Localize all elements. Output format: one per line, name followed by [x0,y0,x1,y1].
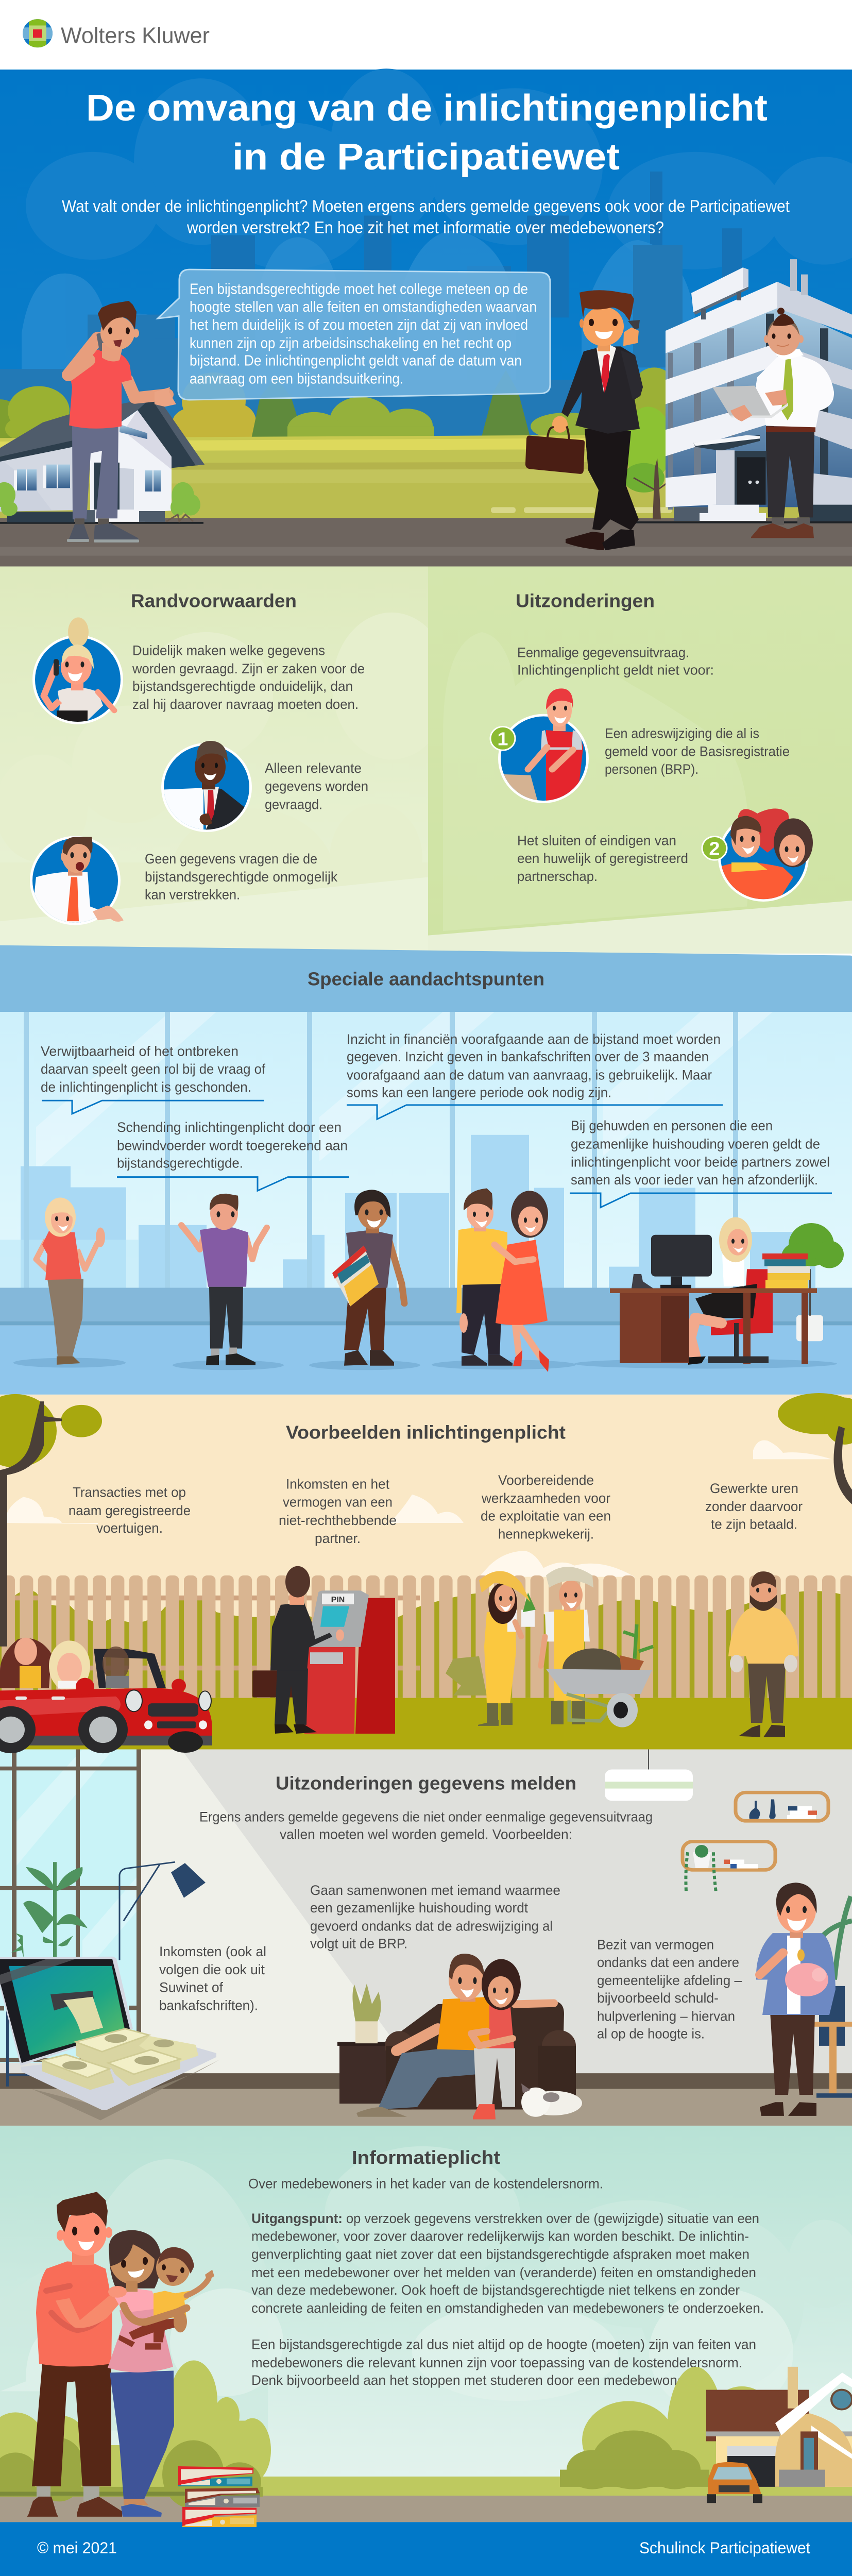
heading: Voorbeelden inlichtingenplicht [286,1421,566,1443]
text: eenmalige gegevensuitvraag: Inlichtingenplicht geldt niet voor: [517,662,714,678]
panel: randvoorwaarden [0,566,451,956]
text: huwelijk: een huwelijk of geregistreerd [517,851,688,866]
text: inkomsten en vermogen: vermogen van een [283,1494,393,1510]
text: inkomsten: volgen die ook uit [159,1962,265,1977]
illustration: fence rails [0,1596,420,1670]
text: verwijtbaarheid: Verwijtbaarheid of het ontbreken [41,1043,238,1059]
illustration: man shrugging [181,1194,267,1365]
text: gewerkte uren: te zijn betaald. [711,1516,797,1532]
text: geen gegevens: bijstandsgerechtigde onmogelijk [145,869,337,885]
text: bezit van vermogen: Bezit van vermogen [597,1937,714,1952]
text: eenmalige gegevensuitvraag: Eenmalige gegevensuitvraag. [517,645,689,660]
badge 2 [702,837,727,860]
text: adreswijziging [605,725,790,777]
text: verwijtbaarheid [41,1043,265,1114]
text: adreswijziging: gemeld voor de Basisregistratie [605,743,790,759]
text: inzicht in financien: voorafgaand aan de datum van aanvraag, is gebruikelijk. Maar [347,1067,712,1082]
callout: speech bubble: het hem duidelijk is of zou moeten zijn dat zij van invloed [190,317,528,333]
illustration: man with folders [332,1190,404,1366]
illustration: man on phone [67,301,176,543]
text: transacties: Transacties met op [73,1484,186,1500]
illustration: couple on sofa [337,1954,582,2120]
panel: voorbeelden inlichtingenplicht [0,1393,852,1753]
illustration: office desk [610,1217,844,1365]
text: samenwonen: gevoerd ondanks dat de adreswijziging al [310,1918,553,1934]
panel: speciale aandachtspunten [0,945,852,1395]
text: subhead: Over medebewoners in het kader van de kostendelersnorm. [248,2176,603,2192]
text: gewerkte uren: zonder daarvoor [705,1499,803,1514]
illustration: woman thumbs up [36,1198,105,1365]
text: verwijtbaarheid: daarvan speelt geen rol bij de vraag of [41,1061,265,1077]
illustration: house [0,398,205,522]
illustration: man at ATM [252,1566,344,1734]
icon: orange car [707,2462,762,2503]
text: bezit van vermogen: ondanks dat een andere [597,1954,739,1970]
illustration: hills and bushes [0,370,852,519]
text: huwelijk: partnerschap. [517,869,598,884]
text: uitgangspunt [251,2211,764,2316]
text: inzicht in financien: Inzicht in financiën voorafgaande aan de bijstand moet worden [347,1031,721,1047]
text: hennepkwekerij: hennepkwekerij. [498,1526,594,1541]
illustration: businessman with briefcase [525,290,643,550]
footer [0,2522,852,2576]
illustration: clouds [5,1440,832,1577]
heading: Randvoorwaarden [131,590,297,611]
heading: Uitzonderingen gegevens melden [276,1772,576,1793]
text: schending [117,1120,349,1191]
illustration: couple [456,1188,549,1372]
intro text [62,197,790,238]
text: uitgangspunt: van deze medebewoner. Ook hoeft de bijstandsgerechtigde niet telkens en zonder [251,2282,740,2298]
text: adreswijziging: personen (BRP). [605,761,698,777]
illustration: left tree [0,1394,102,1647]
text: uitgangspunt: medebewoner, voor zover daarover redelijkerwijs kan worden beschikt. De inlichtin- [251,2228,749,2244]
text: inkomsten [159,1943,266,2013]
illustration: man with tablet [712,308,834,538]
text: gewerkte uren: Gewerkte uren [710,1481,798,1496]
text: gehuwden: inlichtingenplicht voor beide partners zowel [571,1154,830,1170]
title [86,87,768,178]
panel: hero [0,69,852,566]
illustration: hedge behind fence [0,1590,852,1698]
text: intro [199,1809,653,1842]
text: uitgangspunt: Uitgangspunt: [251,2211,343,2226]
illustration: man with empty pockets [728,1571,798,1737]
text: hennepkwekerij: Voorbereidende [498,1472,594,1488]
callout: speech bubble: aanvraag om een bijstandsuitkering. [190,371,403,387]
panel: uitzonderingen gegevens melden [0,1749,852,2126]
logo wordmark: Wolters Kluwer [61,23,210,48]
text: hennepkwekerij: werkzaamheden voor [481,1490,610,1506]
text: huwelijk [517,833,688,884]
text: transacties: voertuigen. [96,1520,163,1536]
text: duidelijk maken [132,642,365,712]
text: uitgangspunt: genverplichting gaat niet zover dat een bijstandsgerechtigde afspraken moet maken [251,2246,749,2262]
text: bezit van vermogen: gemeentelijke afdeling – [597,1973,742,1988]
text: alleen relevante: gegevens worden [265,778,368,794]
icon: worker in circle with badge 1 [490,688,589,804]
text: alleen relevante [265,760,368,812]
text: adreswijziging: Een adreswijziging die al is [605,725,759,741]
text: inkomsten en vermogen: niet-rechthebbende [279,1512,397,1528]
illustration: fence [0,1575,852,1698]
heading: Speciale aandachtspunten [308,969,544,989]
illustration: friends in red car [0,1638,212,1753]
text: gehuwden: gezamenlijke huishouding voeren geldt de [571,1136,820,1151]
text: hennepkwekerij [481,1472,611,1541]
callout: speech bubble: kunnen zijn op zijn arbeidsinschakeling en het recht op [190,335,512,351]
text: duidelijk maken: zal hij daarover navraag moeten doen. [132,697,359,712]
text: samenwonen: volgt uit de BRP. [310,1936,407,1951]
text: een bijstandsgerechtigde [251,2336,756,2388]
illustration: tree behind businessman [623,367,680,519]
text: geen gegevens: kan verstrekken. [145,887,240,902]
text: samenwonen: een gezamenlijke huishouding wordt [310,1900,528,1916]
text: bezit van vermogen [597,1937,742,2041]
ATM label: PIN [331,1596,345,1604]
text: bezit van vermogen: al op de hoogte is. [597,2026,705,2041]
badge 1 [490,727,515,750]
icon: wall shelf with plant [683,1841,775,1892]
icon: woman on phone in circle [32,617,123,725]
badge 1: 1 [497,728,508,749]
text: schending: bewindvoerder wordt toegerekend aan [117,1138,348,1153]
text: inkomsten en vermogen: partner. [315,1531,361,1546]
heading: Informatieplicht [352,2147,500,2168]
header logo: Wolters Kluwer [23,19,210,48]
text: huwelijk: Het sluiten of eindigen van [517,833,676,849]
illustration: ATM machine [304,1590,395,1734]
footer: publisher: Schulinck Participatiewet [639,2539,810,2557]
panel: informatieplicht [0,2126,852,2522]
text: inzicht in financien: gegeven. Inzicht geven in bankafschriften over de 3 maanden [347,1049,709,1064]
text: gehuwden [570,1118,832,1208]
text: transacties: naam geregistreerde [69,1502,191,1518]
icon: man with tie in circle [30,836,124,926]
illustration: man with piggy bank [756,1883,852,2116]
illustration: house and car [706,2367,852,2503]
text: uitgangspunt: met een medebewoner over het melden van (veranderde) feiten en omstandigheden [251,2264,756,2280]
icon: dog [521,2083,582,2117]
text: uitgangspunt: concrete aanleiding de feiten en omstandigheden van medebewoners te onderzoeken. [251,2300,764,2316]
illustration: bushes [0,2361,773,2509]
text: alleen relevante: gevraagd. [265,796,322,812]
text: samenwonen [310,1883,560,1951]
text: een bijstandsgerechtigde: Denk bijvoorbeeld aan het stoppen met studeren door een medebewoner. [251,2372,692,2388]
text: inzicht in financien [347,1031,723,1119]
icon: logo globe [23,19,53,47]
intro text: worden verstrekt? En hoe zit het met informatie over medebewoners? [186,218,664,238]
illustration: man gardener with wheelbarrow [541,1567,653,1727]
icon: pendant lamp [605,1749,693,1801]
footer: date: © mei 2021 [37,2539,117,2557]
illustration: office building [666,259,852,521]
icon: wall shelf with vases [736,1792,828,1821]
window frame [0,1749,141,2089]
title: De omvang van de inlichtingenplicht [86,87,768,129]
text: schending: Schending inlichtingenplicht door een [117,1120,342,1135]
text: intro: Ergens anders gemelde gegevens die niet onder eenmalige gegevensuitvraag [199,1809,653,1824]
callout: speech bubble: Een bijstandsgerechtigde moet het college meteen op de [190,281,528,297]
title: in de Participatiewet [232,136,620,178]
icon: couple in circle with badge 2 [702,808,813,902]
text: duidelijk maken: Duidelijk maken welke gegevens [132,642,325,658]
callout: speech bubble: bijstand. De inlichtingenplicht geldt vanaf de datum van [190,353,522,369]
illustration: family [27,2192,214,2517]
text: gehuwden: Bij gehuwden en personen die een [571,1118,773,1133]
text: transacties [69,1484,191,1536]
illustration: woman gardener [446,1571,536,1726]
icon: floor lamp [6,1862,206,2087]
text: inkomsten: Inkomsten (ook al [159,1943,266,1959]
text: samenwonen: Gaan samenwonen met iemand waarmee [310,1883,560,1898]
text: gehuwden: samen als voor ieder van hen afzonderlijk. [571,1172,818,1188]
road and grass [0,2477,852,2522]
text: bezit van vermogen: bijvoorbeeld schuld- [597,1990,719,2006]
illustration: right tree [778,1393,852,1504]
heading: Uitzonderingen [516,590,655,611]
text: gewerkte uren [705,1481,803,1532]
icon: businessman in circle [155,741,252,833]
badge 2: 2 [709,838,720,859]
text: een bijstandsgerechtigde: Een bijstandsgerechtigde zal dus niet altijd op de hoogte (moeten) zijn van feiten van [251,2336,756,2352]
text: intro: vallen moeten wel worden gemeld. Voorbeelden: [280,1826,572,1842]
text: uitgangspunt: op verzoek gegevens verstrekken over de (gewijzigde) situatie van een [346,2211,759,2226]
text: hennepkwekerij: de exploitatie van een [481,1508,611,1523]
text: inkomsten: Suwinet of [159,1979,223,1995]
text: bezit van vermogen: hulpverlening – hiervan [597,2008,735,2024]
panel: uitzonderingen [428,566,852,954]
text: inkomsten en vermogen [279,1476,397,1546]
text: een bijstandsgerechtigde: medebewoners die relevant kunnen zijn voor toepassing van de kostendelersnorm. [251,2354,742,2370]
text: geen gegevens [145,851,337,902]
icon: plant by window [11,1862,88,1958]
text: alleen relevante: Alleen relevante [265,760,362,776]
text: geen gegevens: Geen gegevens vragen die de [145,851,317,867]
callout: speech bubble: hoogte stellen van alle feiten en omstandigheden waarvan [190,299,537,315]
callout: speech bubble [158,269,550,400]
text: duidelijk maken: worden gevraagd. Zijn er zaken voor de [132,660,365,676]
text: eenmalige gegevensuitvraag [517,645,714,678]
text: verwijtbaarheid: de inlichtingenplicht is geschonden. [41,1079,251,1095]
illustration: stack of folders [178,2466,260,2527]
road [0,518,852,566]
text: inzicht in financien: soms kan een langere periode ook nodig zijn. [347,1084,611,1100]
text: schending: bijstandsgerechtigde. [117,1155,243,1171]
text: duidelijk maken: bijstandsgerechtigde onduidelijk, dan [132,679,353,694]
illustration: laptop with money [0,1957,220,2120]
text: inkomsten: bankafschriften). [159,1997,258,2013]
text: inkomsten en vermogen: Inkomsten en het [286,1476,389,1492]
